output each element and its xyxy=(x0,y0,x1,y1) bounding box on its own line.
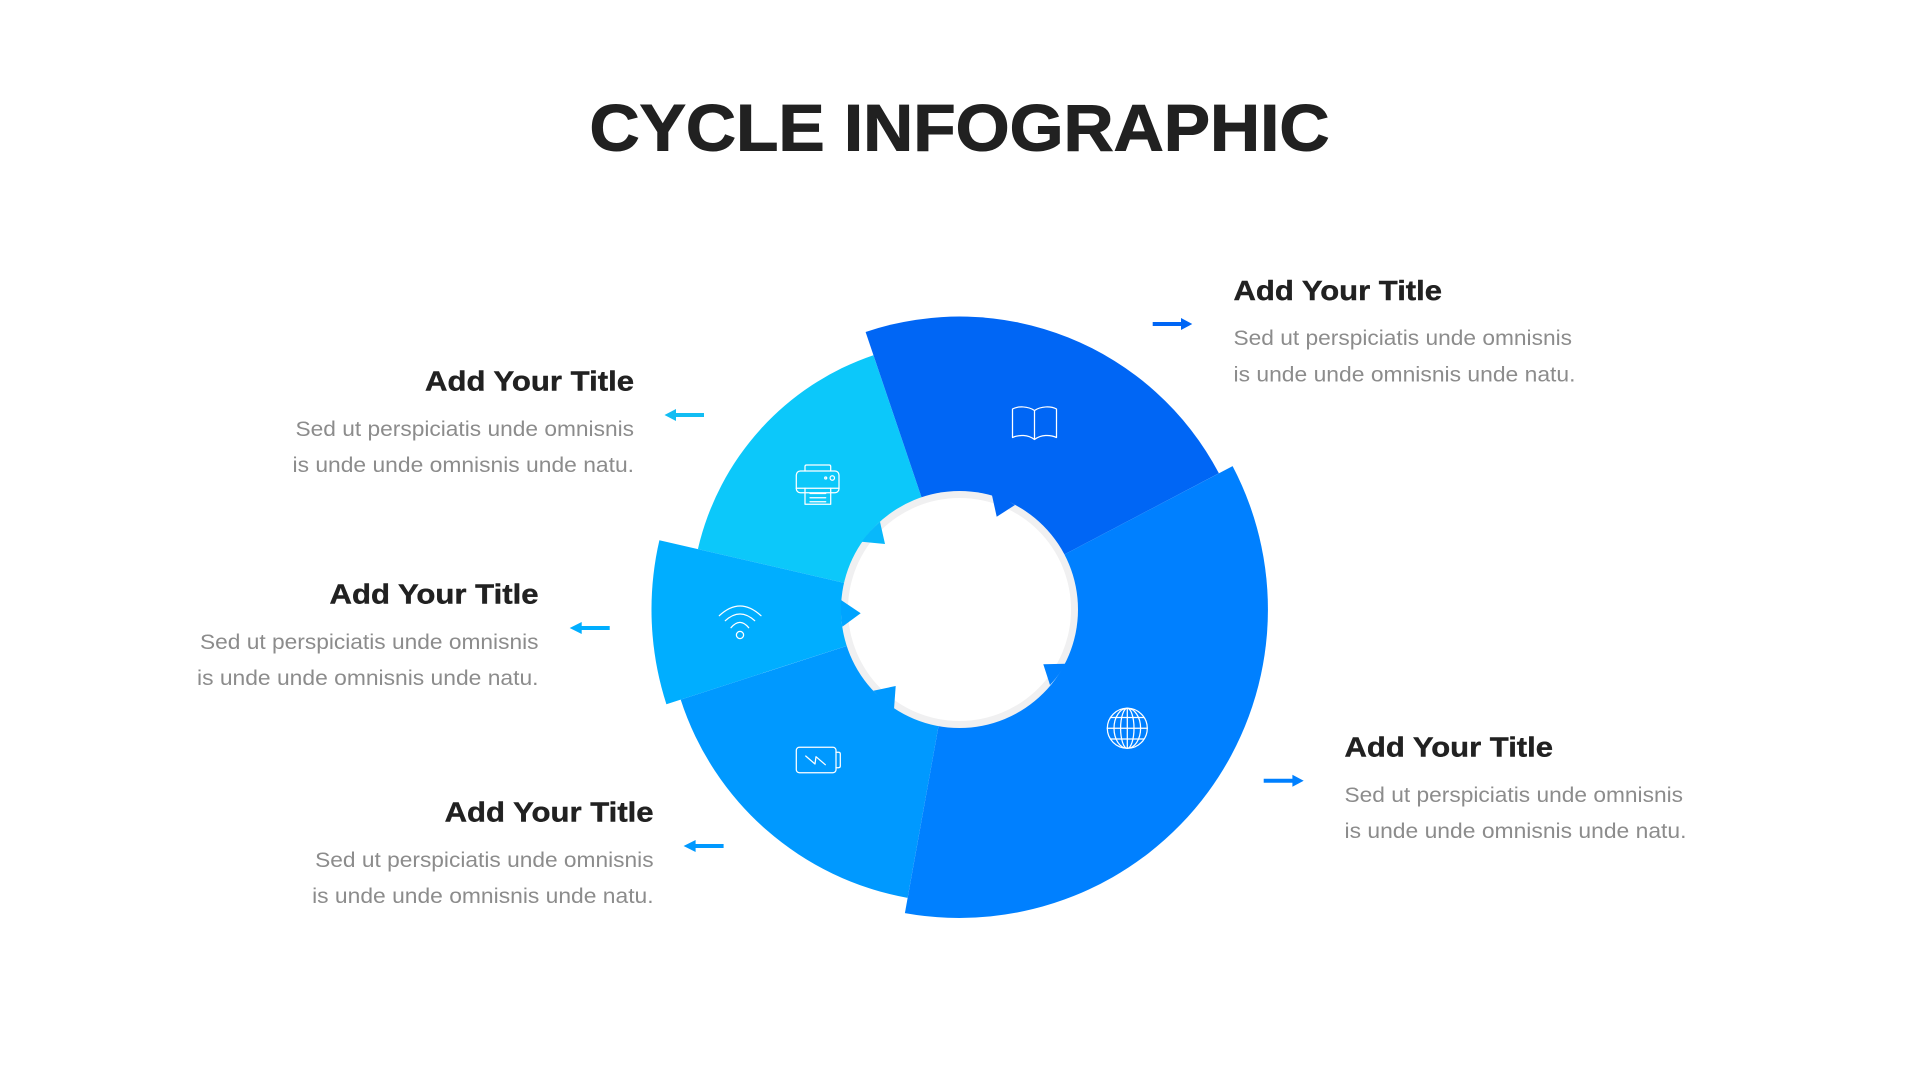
sector: globe xyxy=(905,466,1268,918)
body text: Sed ut perspiciatis unde omnisnis xyxy=(200,630,538,654)
icon: printer xyxy=(796,465,839,504)
sector: printer xyxy=(698,355,960,610)
icon: book xyxy=(1012,407,1056,440)
notch: printer xyxy=(862,522,885,544)
block: top right xyxy=(1153,275,1576,386)
block: top right: is unde unde omnisnis unde natu. xyxy=(1234,362,1576,386)
block: bottom right: is unde unde omnisnis unde natu. xyxy=(1344,819,1686,843)
heading: Add Your Title xyxy=(330,579,538,610)
notch: battery xyxy=(873,686,896,709)
sector: book xyxy=(866,317,1219,610)
arrow xyxy=(1153,318,1192,330)
arrow xyxy=(684,840,724,852)
sector: battery xyxy=(681,610,960,898)
block: bottom left xyxy=(312,797,724,908)
center ring xyxy=(841,491,1078,728)
block: top left: is unde unde omnisnis unde natu. xyxy=(292,453,634,477)
title: CYCLE INFOGRAPHIC xyxy=(590,90,1330,164)
block: middle left xyxy=(197,579,610,690)
block: bottom right xyxy=(1264,731,1686,843)
block: top left xyxy=(292,366,704,477)
notch: book xyxy=(992,494,1015,517)
heading: Add Your Title xyxy=(425,366,634,397)
cycle wheel xyxy=(651,317,1268,918)
arrow xyxy=(1264,775,1304,787)
arrow xyxy=(664,409,704,421)
heading: Add Your Title xyxy=(445,797,654,828)
body text: Sed ut perspiciatis unde omnisnis xyxy=(1234,326,1572,350)
icon: battery xyxy=(796,747,840,773)
heading: Add Your Title xyxy=(1234,275,1442,306)
block: bottom left: is unde unde omnisnis unde natu. xyxy=(312,884,654,908)
heading: Add Your Title xyxy=(1344,731,1553,762)
arrow xyxy=(570,622,610,634)
body text: Sed ut perspiciatis unde omnisnis xyxy=(296,417,634,441)
icon: wifi xyxy=(719,606,761,639)
body text: Sed ut perspiciatis unde omnisnis xyxy=(315,848,654,872)
notch: wifi xyxy=(841,600,861,627)
center hole xyxy=(848,498,1071,721)
sector: wifi xyxy=(651,540,960,704)
body text: Sed ut perspiciatis unde omnisnis xyxy=(1344,783,1683,807)
notch: globe xyxy=(1043,664,1066,685)
block: middle left: is unde unde omnisnis unde natu. xyxy=(197,666,538,690)
icon: globe xyxy=(1107,708,1147,748)
